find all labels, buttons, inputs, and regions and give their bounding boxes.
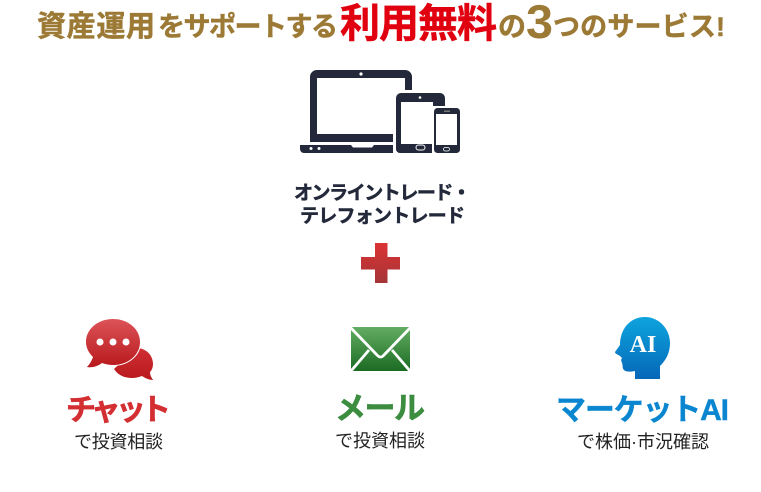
icon: AI head: [615, 317, 670, 379]
heading: online and telephone trading: オンライントレード・: [294, 183, 471, 204]
icon: plus sign: [361, 243, 400, 283]
caption: market AI: で株価·市況確認: [577, 432, 709, 452]
label: market AI: マーケットAI: [556, 394, 729, 427]
service: market AI: [556, 317, 729, 452]
service: chat: [66, 319, 171, 452]
icon: laptop, tablet and phone: [300, 70, 460, 153]
caption: mail: で投資相談: [335, 431, 425, 451]
title: 資産運用: [37, 10, 155, 43]
icon: envelope: [350, 327, 411, 371]
caption: chat: で投資相談: [74, 432, 163, 452]
title: をサポートする: [158, 12, 338, 42]
icon: AI head: AI: [630, 332, 656, 358]
title: つのサービス!: [553, 12, 725, 42]
icon: chat bubbles: [86, 319, 153, 380]
heading: online and telephone trading: [294, 183, 471, 227]
label: chat: チャット: [66, 394, 171, 427]
service: mail: [335, 327, 425, 451]
label: mail: メール: [335, 391, 425, 426]
title: の: [498, 11, 526, 42]
heading: online and telephone trading: テレフォントレード: [300, 206, 465, 227]
title: [37, 0, 725, 48]
title: 利用無料: [340, 2, 497, 46]
